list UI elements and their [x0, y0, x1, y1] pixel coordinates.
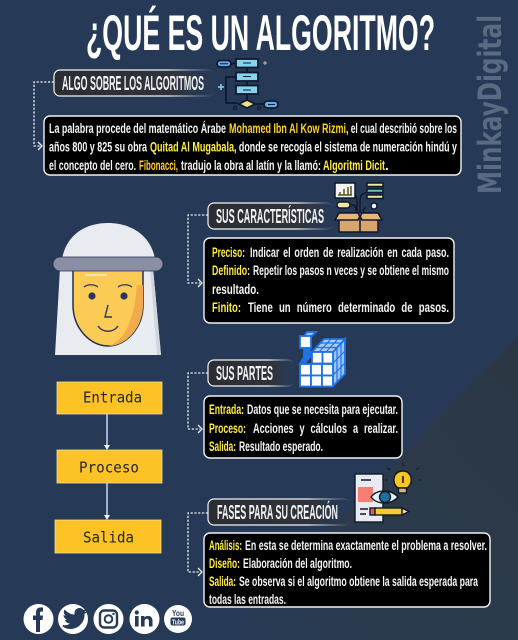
connector arrows — [106, 414, 108, 516]
heading label: SUS PARTES — [216, 363, 273, 385]
arrow — [198, 279, 202, 287]
text box: Elaboración del algoritmo. — [243, 556, 352, 571]
icon: document, eye, pencil and bulb — [355, 463, 422, 522]
eyes — [88, 292, 96, 300]
section: sus partes — [188, 332, 402, 458]
text box: Algoritmi Dicit — [323, 158, 385, 173]
text box: años 800 y 825 su obra — [49, 140, 147, 154]
section: sus características: SUS CARACTERÍSTICAS — [216, 205, 324, 228]
box: proceso — [57, 450, 162, 483]
dashed connector — [188, 513, 208, 572]
dashed connector — [34, 82, 54, 146]
box: salida — [55, 520, 161, 553]
dashed connector — [188, 215, 208, 283]
headdress — [62, 223, 155, 259]
icon: youtube — [164, 605, 192, 633]
heading label — [208, 360, 294, 386]
text box: Preciso: — [212, 245, 245, 260]
text box: Entrada: — [209, 402, 244, 417]
arrow — [198, 568, 202, 576]
text box: Diseño: — [209, 556, 240, 571]
dashed connector — [188, 373, 208, 429]
heading label — [208, 203, 333, 229]
text box: , el cual describió sobre los — [346, 121, 457, 136]
text box: Definido: — [212, 263, 250, 278]
text box — [204, 396, 402, 458]
text box: Resultado esperado. — [239, 439, 323, 454]
section: algo sobre los algoritmos: ALGO SOBRE LOS ALGORITMOS — [62, 73, 204, 95]
icon: youtube: Tube — [172, 620, 184, 626]
text box — [204, 533, 490, 607]
text box — [204, 238, 454, 323]
icon: box with data — [335, 183, 383, 232]
face — [73, 268, 143, 346]
box: salida: Salida — [83, 528, 134, 546]
section: fases para su creación: FASES PARA SU CREACIÓN — [217, 500, 338, 524]
text box: Quitad Al Mugabala — [150, 140, 234, 154]
box: proceso: Proceso — [79, 458, 139, 476]
icon: linkedin — [130, 604, 160, 634]
heading label — [54, 70, 214, 96]
icon: twitter — [58, 604, 88, 634]
eyebrows — [84, 285, 132, 287]
flow diagram — [55, 382, 162, 553]
text box: tradujo la obra al latín y la llamó: — [181, 158, 321, 173]
icon: instagram — [94, 604, 124, 634]
social icons — [24, 604, 192, 634]
heading label — [208, 499, 350, 525]
box: entrada: Entrada — [83, 388, 142, 406]
text box: resultado. — [212, 282, 259, 297]
text box: Proceso: — [209, 421, 246, 436]
section: sus características — [188, 183, 454, 323]
icon: data cube — [300, 332, 345, 386]
text box: Salida: — [209, 439, 236, 454]
text box: . — [385, 158, 389, 173]
text box: Acciones y cálculos a realizar. — [253, 421, 398, 436]
box: entrada — [57, 382, 162, 414]
icon: facebook — [24, 604, 54, 634]
icon: youtube: You — [172, 609, 184, 618]
icon: flowchart — [217, 59, 278, 110]
text box: Datos que se necesita para ejecutar. — [247, 402, 398, 417]
text box: Mohamed Ibn Al Kow Rizmi — [229, 121, 346, 136]
text box: Análisis: — [209, 538, 242, 553]
section: algo sobre los algoritmos — [34, 59, 461, 175]
text box: Fibonacci, — [139, 158, 178, 173]
nose and mouth — [98, 305, 118, 331]
text box: todas las entradas. — [209, 592, 286, 607]
text box: el concepto del cero. — [49, 158, 136, 173]
text box: La palabra procede del matemático Árabe — [49, 121, 226, 136]
text box: Finito: — [212, 300, 241, 315]
text box: Salida: — [209, 574, 236, 589]
dark diagonal background area — [225, 335, 518, 640]
text box — [44, 116, 461, 175]
section: fases para su creación — [188, 463, 490, 607]
arrow — [38, 142, 42, 150]
arrow — [198, 425, 202, 433]
head band — [53, 257, 163, 271]
person illustration — [53, 223, 163, 355]
